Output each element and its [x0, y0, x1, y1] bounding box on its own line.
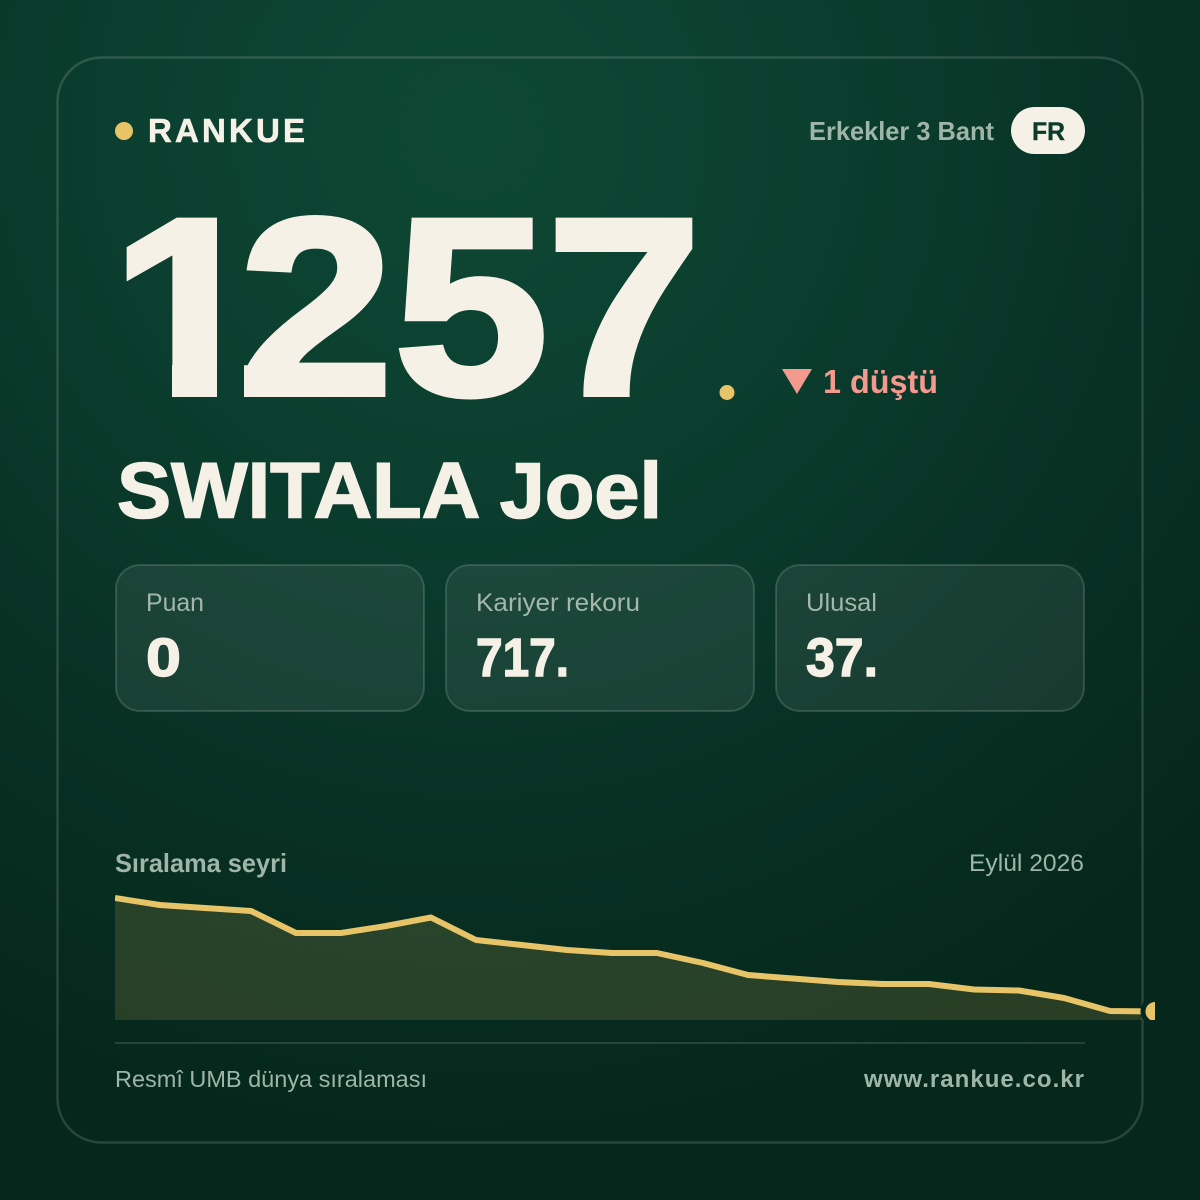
rank number: 1257: [111, 167, 701, 448]
footer website: www.rankue.co.kr: [863, 1066, 1084, 1093]
panel: career record: [446, 565, 754, 711]
panel: points: 0: [146, 628, 181, 688]
country badge: [1011, 107, 1085, 154]
panel: points: [116, 565, 424, 711]
panel: national: Ulusal: [806, 589, 877, 617]
rank dot: [720, 385, 734, 400]
chart heading: Sıralama seyri: [115, 848, 287, 878]
footer source: Resmî UMB dünya sıralaması: [115, 1066, 427, 1092]
brand header: RANKUE: [148, 112, 305, 149]
footer divider: [115, 1042, 1085, 1044]
panel: points: Puan: [146, 589, 204, 617]
panel: career record: 717.: [476, 628, 569, 688]
panel: national: [776, 565, 1084, 711]
country badge: FR: [1032, 118, 1065, 146]
ranking trend chart: [115, 898, 1167, 1024]
category label: Erkekler 3 Bant: [809, 116, 994, 146]
player name: SWITALA Joel: [117, 446, 662, 534]
panel: national: 37.: [806, 628, 878, 688]
panel: career record: Kariyer rekoru: [476, 589, 640, 617]
rank change: 1 düştü: [823, 363, 938, 400]
chart date: Eylül 2026: [969, 850, 1084, 877]
